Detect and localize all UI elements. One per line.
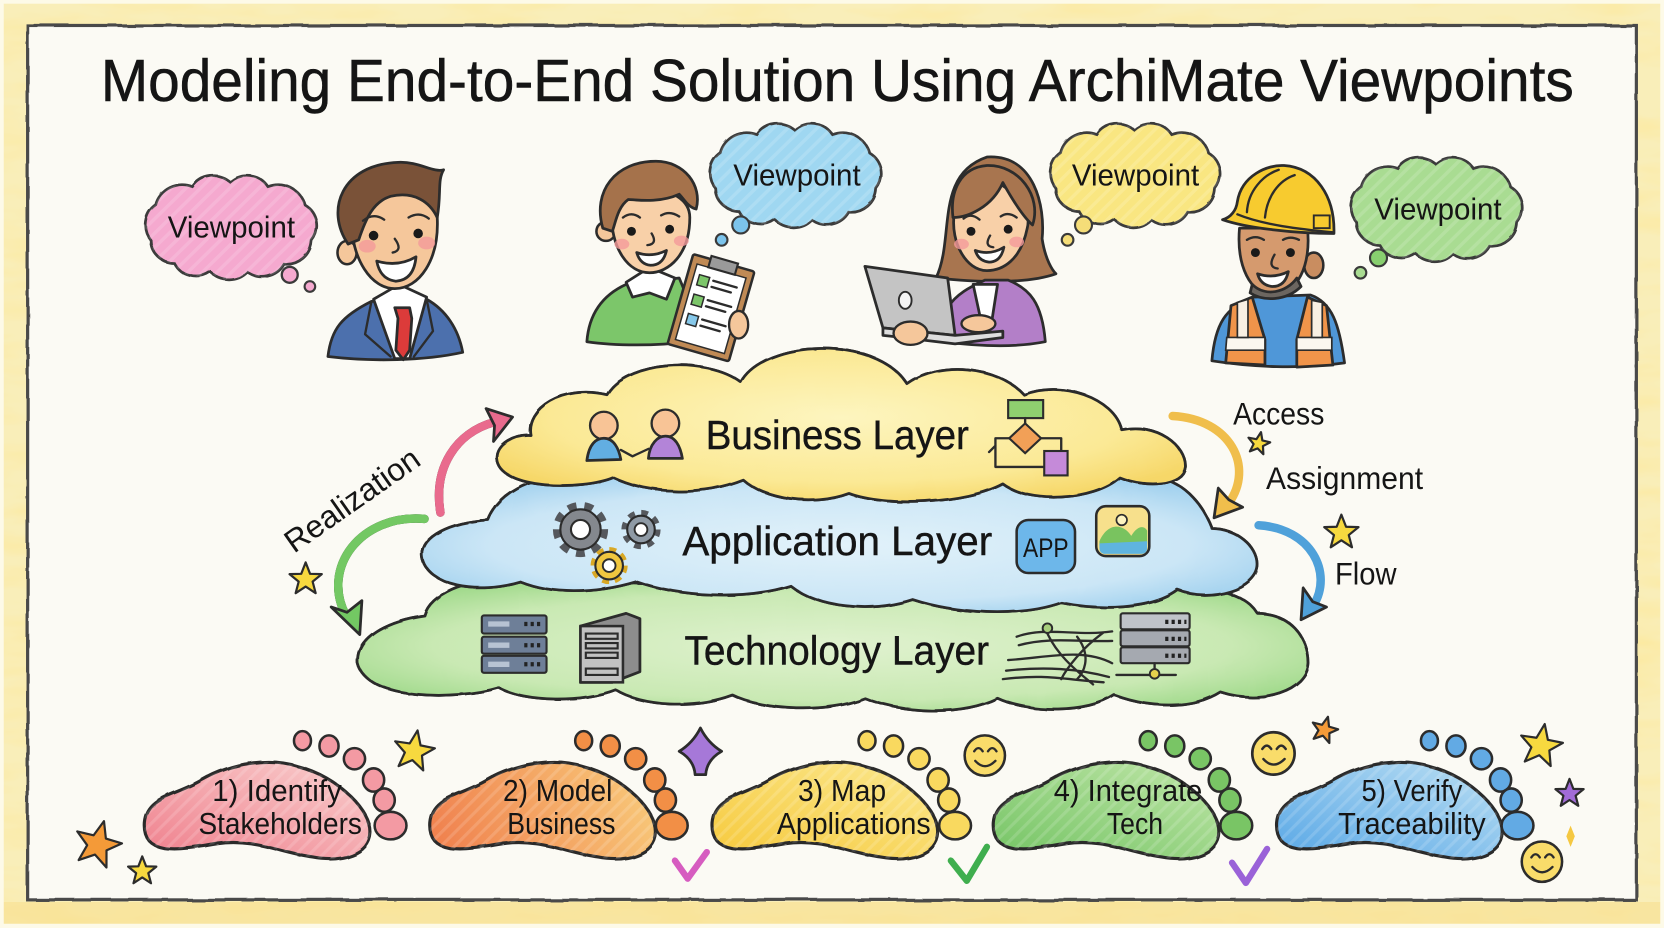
arrow: realization down, green: [331, 519, 425, 635]
arrow: access, gold: [1173, 416, 1243, 518]
step 3 footprint: Map Applications: Applications: [777, 806, 931, 841]
icon: server stack: [482, 615, 547, 673]
arrow: flow, blue: [1259, 525, 1327, 620]
icon: tower server: [581, 613, 640, 682]
icon: network cables: [1003, 623, 1112, 684]
step 1 footprint: Identify Stakeholders: 1) Identify: [212, 773, 342, 808]
panel: application layer cloud: [422, 478, 1258, 612]
step 5 footprint: Verify Traceability: [1277, 731, 1533, 859]
stakeholder 3: yellow viewpoint bubble: Viewpoint: [1072, 158, 1200, 193]
stakeholder 1: pink viewpoint bubble: [145, 176, 317, 292]
panel: technology layer cloud: [358, 581, 1308, 711]
stakeholder 4: green viewpoint bubble: [1351, 158, 1522, 279]
stakeholder 2: blue viewpoint bubble: [710, 124, 881, 246]
icon: image tile: [1096, 506, 1149, 556]
icon: small yellow sparkle: [1566, 826, 1575, 847]
stakeholder 4: construction worker with hard hat: [1212, 165, 1345, 367]
icon: APP tile: APP: [1023, 533, 1069, 563]
icon: APP tile: [1017, 520, 1075, 573]
icon: purple four-point star: [679, 728, 722, 775]
step 4 footprint: Integrate Tech: Tech: [1107, 806, 1163, 841]
arrow: realization up, pink: [439, 409, 513, 513]
label: Access: Access: [1233, 395, 1324, 431]
icon: smiley faces: [965, 732, 1562, 882]
stakeholder 1: businessman in suit: [328, 162, 463, 360]
step 5 footprint: Verify Traceability: 5) Verify: [1362, 773, 1463, 808]
step 2 footprint: Model Business: 2) Model: [503, 773, 612, 808]
step 1 footprint: Identify Stakeholders: Stakeholders: [198, 806, 362, 841]
step 3 footprint: Map Applications: [712, 731, 971, 859]
label: Assignment: Assignment: [1266, 460, 1423, 496]
step 3 footprint: Map Applications: 3) Map: [798, 773, 886, 808]
icon: two people shaking hands: [587, 410, 682, 461]
decorative stars: [70, 430, 1584, 883]
label: Flow: Flow: [1335, 556, 1397, 592]
label: Realization: Realization: [277, 440, 427, 560]
heading: technology layer: Technology Layer: [684, 627, 989, 673]
stakeholder 3: yellow viewpoint bubble: [1050, 124, 1220, 246]
icon: check marks: [675, 847, 1267, 883]
step 1 footprint: Identify Stakeholders: [144, 731, 406, 859]
heading: application layer: Application Layer: [682, 518, 992, 564]
stakeholder 4: green viewpoint bubble: Viewpoint: [1374, 192, 1502, 227]
title: Modeling End-to-End Solution Using ArchiMate Viewpoints: [101, 47, 1574, 114]
step 5 footprint: Verify Traceability: Traceability: [1338, 806, 1486, 841]
stakeholder 2: blue viewpoint bubble: Viewpoint: [733, 158, 861, 193]
icon: business process flow: [989, 400, 1068, 475]
step 4 footprint: Integrate Tech: 4) Integrate: [1054, 773, 1202, 808]
stakeholder 1: pink viewpoint bubble: Viewpoint: [168, 210, 295, 245]
icon: gears: [557, 506, 657, 580]
panel: business layer cloud: [497, 348, 1185, 502]
stakeholder 2: analyst with clipboard: [587, 161, 755, 361]
stakeholder 3: woman with laptop: [865, 157, 1056, 346]
step 2 footprint: Model Business: Business: [507, 806, 616, 841]
step 4 footprint: Integrate Tech: [993, 731, 1252, 859]
step 2 footprint: Model Business: [430, 731, 688, 859]
heading: business layer: Business Layer: [706, 412, 969, 458]
icon: rack server with network node: [1116, 613, 1190, 679]
